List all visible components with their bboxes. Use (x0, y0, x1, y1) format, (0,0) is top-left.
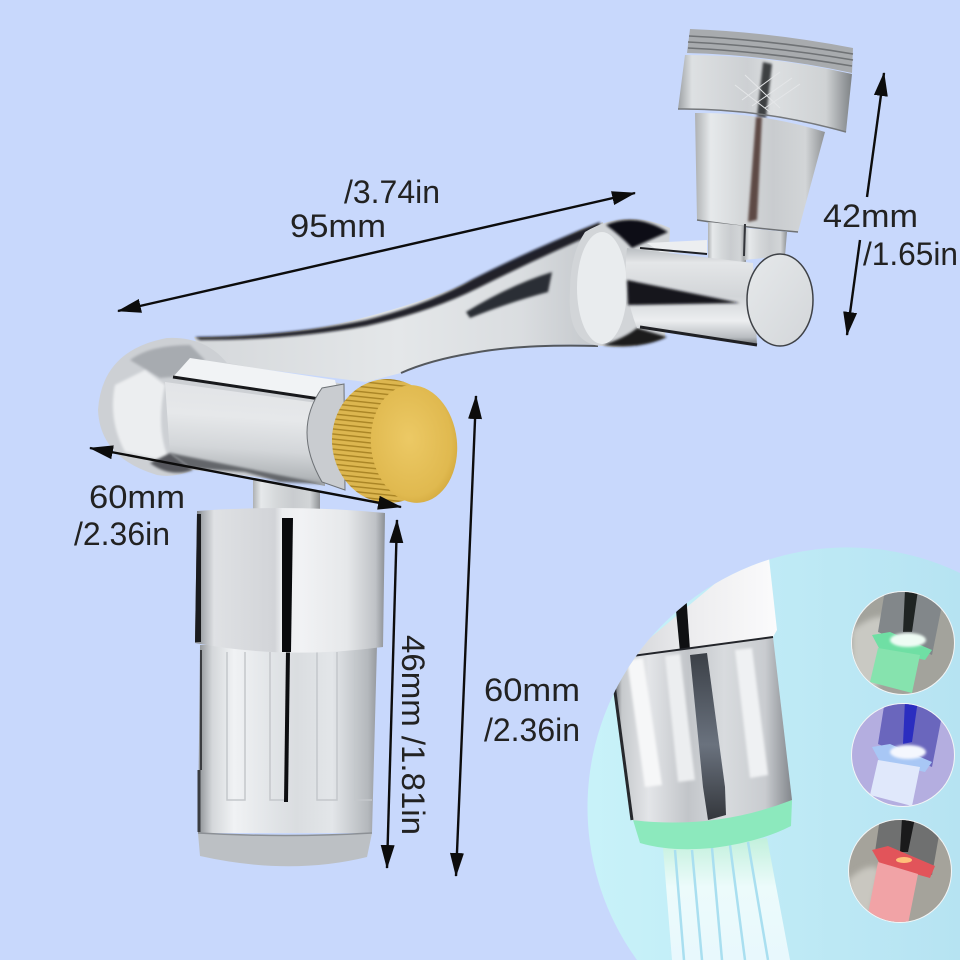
label: body width (74, 479, 185, 552)
dimension arrow: spout height (387, 520, 397, 868)
label: spout height: 46mm /1.81in (395, 635, 431, 835)
tapered cone (695, 113, 825, 232)
inset chrome neck (638, 560, 777, 654)
inset water stream (663, 838, 790, 960)
label: head height (823, 198, 958, 272)
dimension arrow: body width (90, 448, 401, 507)
badge: green (850, 590, 958, 698)
label: head height: 42mm (823, 198, 918, 234)
label: body width: /2.36in (74, 516, 170, 552)
swing arm (194, 222, 603, 382)
neck (253, 480, 320, 512)
badge: red (846, 818, 954, 926)
inset green LED ring (633, 800, 792, 849)
inset chrome sleeve (613, 637, 792, 822)
label: total spout height: /2.36in (484, 712, 580, 748)
upper elbow cylinder (626, 240, 813, 346)
label: arm length (290, 174, 440, 244)
lower spout upper sleeve (195, 508, 385, 653)
label: total spout height (484, 672, 580, 748)
label: arm length: 95mm (290, 208, 386, 244)
label: arm length: /3.74in (344, 174, 440, 210)
inset panel: LED close-up (588, 540, 960, 960)
cone stems (708, 222, 787, 262)
knurled collar (678, 55, 852, 132)
lower spout ribbed sleeve (198, 645, 377, 866)
badge: blue (850, 700, 958, 810)
inset chrome neck stripe (676, 603, 690, 649)
label: head height: /1.65in (863, 236, 958, 272)
label: body width: 60mm (89, 479, 185, 515)
horizontal lower body (98, 338, 344, 486)
body band (307, 384, 345, 490)
dimension arrow: arm length (118, 193, 635, 311)
gold knob (328, 375, 463, 507)
threaded top of aerator (687, 29, 853, 73)
dimension arrow: total spout height (456, 396, 476, 876)
dimension arrow: head height (upper) (867, 73, 884, 197)
label: total spout height: 60mm (484, 672, 580, 708)
dimension arrow: head height (lower) (847, 240, 860, 335)
LED colour badges (846, 590, 958, 926)
upper elbow flange (570, 219, 670, 347)
faucet illustration (98, 29, 853, 866)
